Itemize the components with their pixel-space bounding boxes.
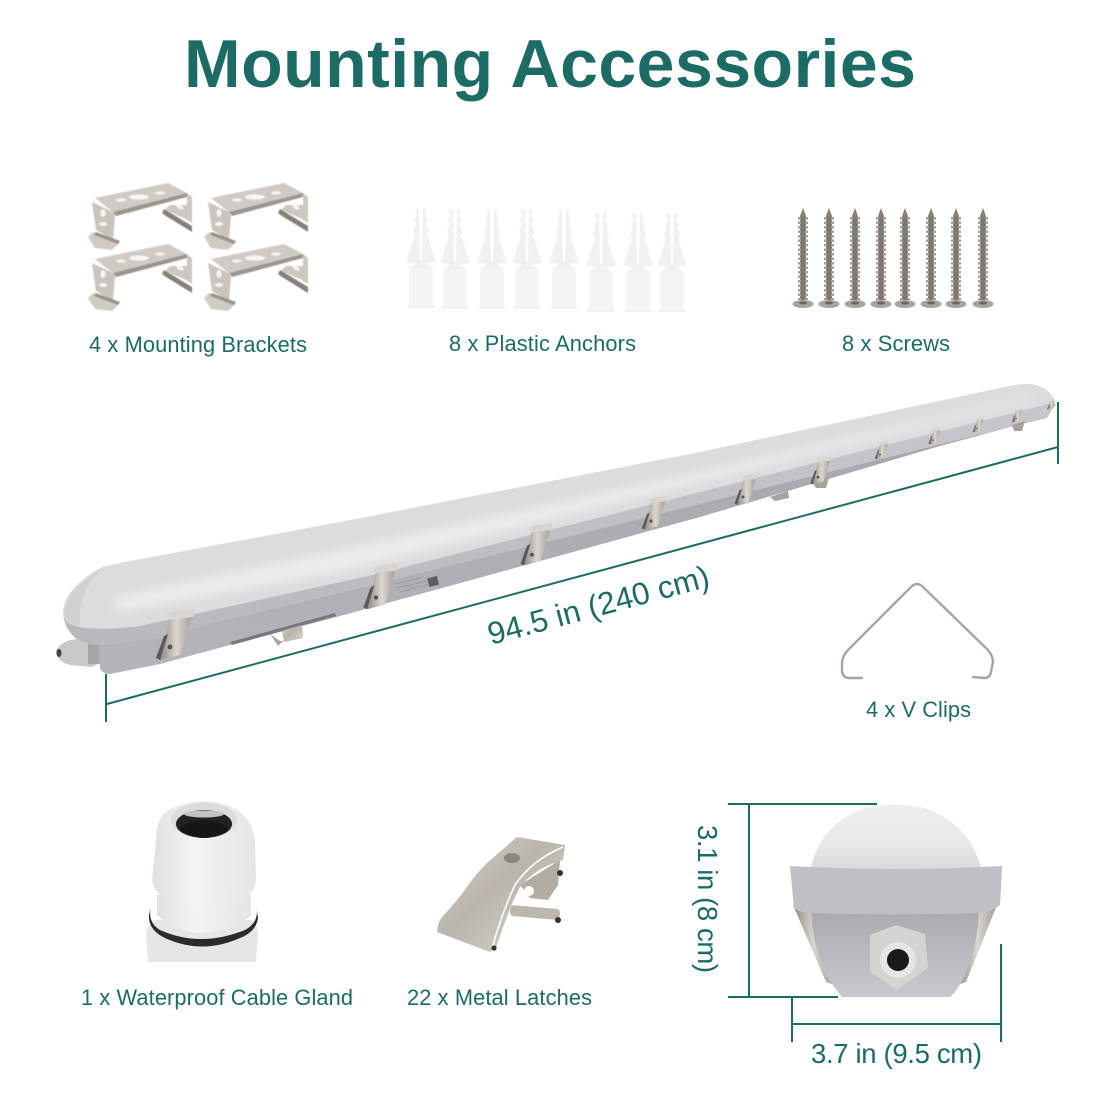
label: cable gland: 1 x Waterproof Cable Gland [81, 985, 353, 1010]
dimension lines [728, 804, 1001, 1042]
label: plastic anchors: 8 x Plastic Anchors [449, 331, 636, 356]
label: screws: 8 x Screws [842, 331, 950, 356]
metal latches on lamp [156, 399, 1055, 660]
lamp lower body [98, 400, 1056, 674]
cable gland at lamp end [56, 637, 102, 667]
icon: eight screws [792, 208, 994, 308]
product label text block [396, 576, 439, 592]
panel: V clips [842, 584, 993, 722]
lamp diffuser cover [63, 384, 1056, 629]
icon: four mounting brackets [88, 183, 308, 311]
lamp grey side band [63, 396, 1055, 645]
end view dome [810, 804, 982, 872]
label: V clips: 4 x V Clips [866, 697, 971, 722]
panel: screws [792, 208, 994, 356]
icon: V clip [842, 584, 993, 678]
mounting slot strip [230, 613, 336, 645]
under-lamp brackets [270, 421, 1025, 646]
product: full-length vapor tight light [56, 384, 1056, 674]
diffuser highlight [110, 396, 1030, 612]
end view band [790, 866, 1002, 914]
panel: plastic anchors [406, 208, 687, 356]
title: Mounting Accessories [184, 26, 916, 102]
product: lamp end view [790, 804, 1002, 997]
panel: mounting brackets [88, 183, 308, 357]
length label: 94.5 in (240 cm) [483, 558, 713, 652]
icon: waterproof cable gland [146, 802, 258, 962]
dimension: lamp length [106, 402, 1058, 722]
lamp end shading [64, 570, 100, 626]
label: metal latches: 22 x Metal Latches [407, 985, 592, 1010]
panel: cable gland [81, 802, 353, 1010]
end view cable gland [870, 925, 928, 990]
width label: 3.7 in (9.5 cm) [811, 1038, 982, 1069]
end view body [811, 905, 979, 997]
height label: 3.1 in (8 cm) [692, 825, 723, 973]
icon: metal latch [437, 837, 565, 952]
icon: eight plastic anchors [406, 208, 687, 312]
panel: metal latches [407, 837, 592, 1010]
label: mounting brackets: 4 x Mounting Brackets [89, 332, 307, 357]
dimension lines [106, 402, 1058, 722]
panel: end view with dimensions [692, 804, 1002, 1069]
side steel latches [793, 905, 835, 985]
